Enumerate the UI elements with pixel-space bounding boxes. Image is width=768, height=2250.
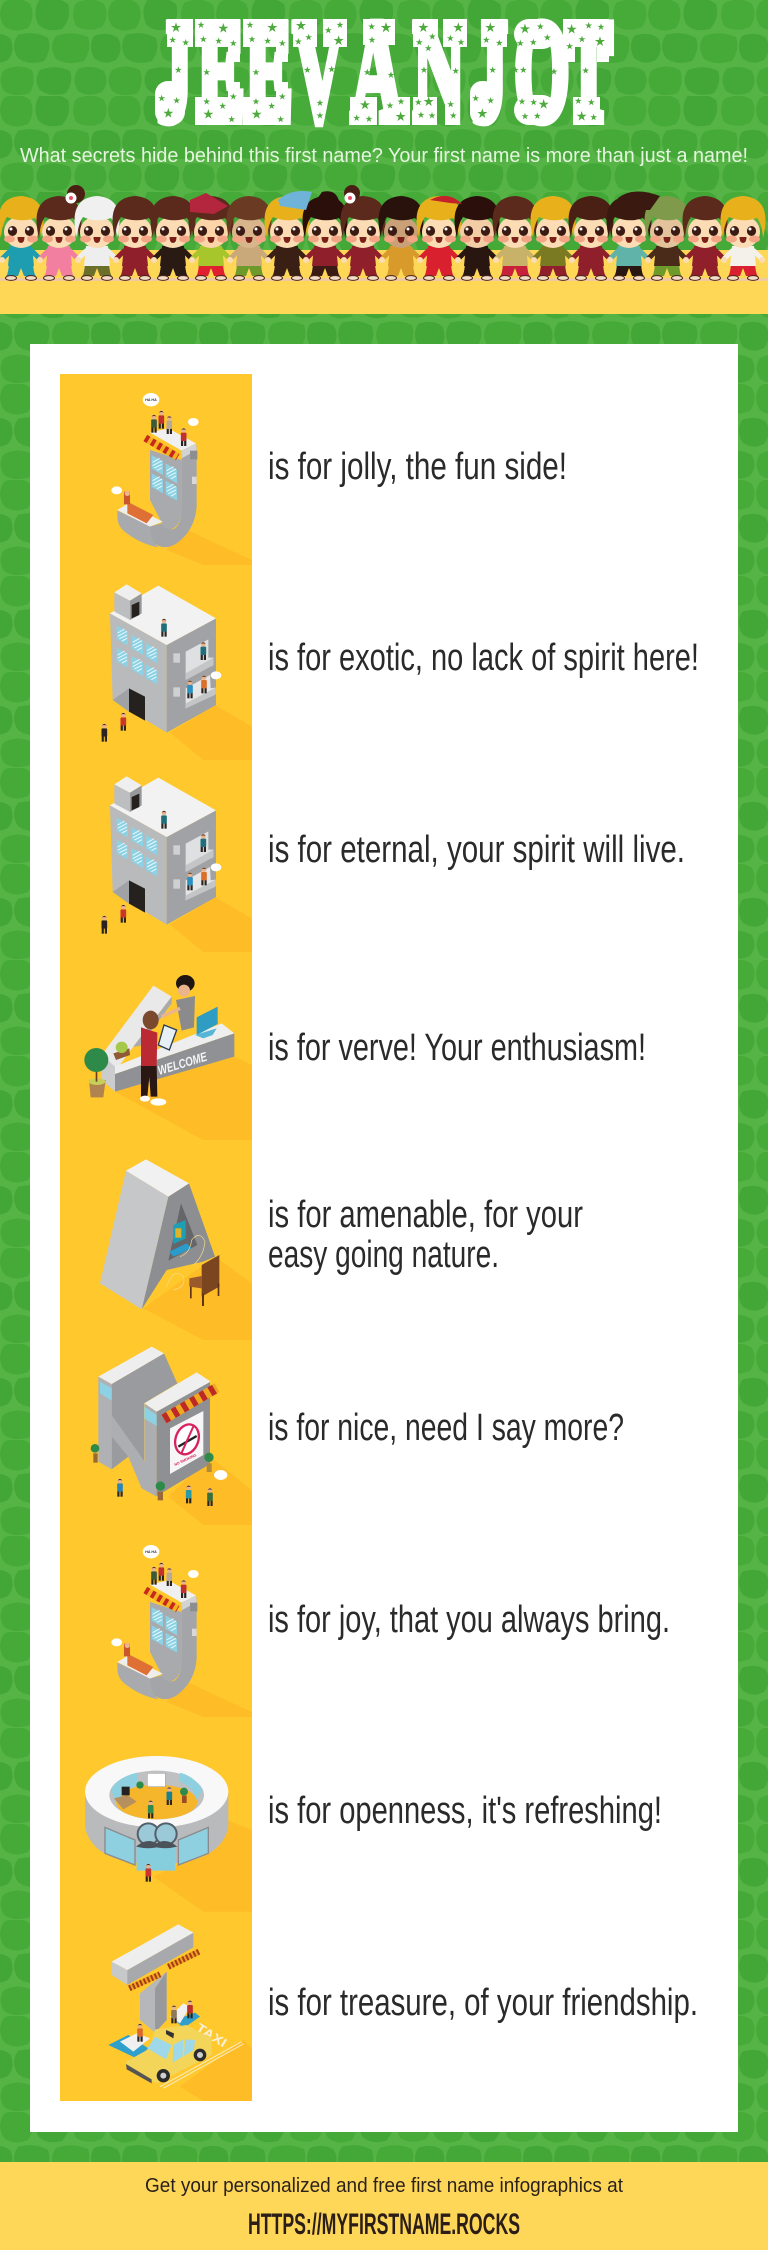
text: A: easy going nature. <box>268 1234 499 1276</box>
icon: letter T taxi stand: TAXI <box>193 2021 229 2050</box>
footer url: HTTPS://MYFIRSTNAME.ROCKS <box>248 2208 520 2241</box>
icon: letter J building <box>111 393 252 565</box>
panel: white content card <box>30 344 738 2132</box>
footer text: Get your personalized and free first name infographics at <box>145 2175 623 2197</box>
footer band <box>0 2162 768 2250</box>
text: O: is for openness, it's refreshing! <box>268 1790 662 1832</box>
text: N: is for nice, need I say more? <box>268 1407 624 1449</box>
icon: letter N <box>91 1347 252 1525</box>
icon: letter N: NO SMOKING <box>174 1453 197 1467</box>
text: V: is for verve! Your enthusiasm! <box>268 1027 646 1069</box>
icon: second letter E building <box>101 776 252 952</box>
icon: letter V reception desk: WELCOME <box>156 1050 209 1078</box>
icon: letter E building <box>101 584 252 760</box>
icon: second letter J building <box>111 1545 252 1717</box>
icon: letter O optician ring <box>85 1756 252 1912</box>
text: J: is for jolly, the fun side! <box>268 446 567 488</box>
icon: letter T taxi stand <box>108 1924 252 2101</box>
crowd banner <box>0 185 768 314</box>
text: A <box>268 1194 583 1276</box>
panel: yellow illustration strip <box>60 374 252 2101</box>
icon: letter A <box>100 1159 252 1340</box>
tagline: What secrets hide behind this first name? Your first name is more than just a name! <box>20 145 748 167</box>
icon: letter V reception desk <box>84 975 252 1140</box>
text: A: is for amenable, for your <box>268 1194 583 1236</box>
